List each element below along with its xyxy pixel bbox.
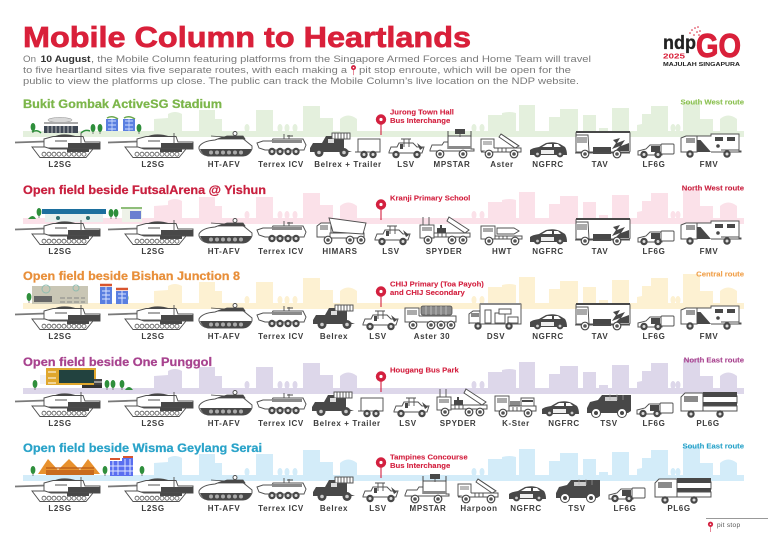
route label: South East route: [682, 442, 745, 450]
vehicle: NGFRC: NGFRC: [532, 247, 564, 256]
route label: Central route: [696, 270, 745, 278]
vehicle: MPSTAR: MPSTAR: [410, 504, 446, 513]
vehicle: HT-AFV: HT-AFV: [208, 247, 240, 256]
vehicle: PL6G: PL6G: [667, 504, 691, 513]
vehicle: Terrex ICV: Terrex ICV: [258, 247, 304, 256]
vehicle: HT-AFV: HT-AFV: [208, 419, 240, 428]
vehicle: HT-AFV: [199, 476, 252, 513]
vehicle: PL6G: [655, 478, 711, 513]
vehicle: Aster 30: [405, 306, 456, 341]
vehicle: L2SG: L2SG: [48, 332, 72, 341]
vehicle: LSV: LSV: [397, 160, 415, 169]
vehicle: LF6G: [609, 488, 645, 513]
pit stop marker: Kranji Primary School: [390, 194, 470, 202]
legend: pit stop: pit stop: [717, 522, 740, 529]
route label: North East route: [684, 356, 745, 364]
vehicle: Aster 30: Aster 30: [414, 332, 450, 341]
vehicle: Belrex: [313, 305, 355, 341]
heading: Open field beside One Punggol: [23, 357, 212, 369]
vehicle: NGFRC: NGFRC: [532, 160, 564, 169]
vehicle: Belrex: [313, 477, 355, 513]
vehicle: LF6G: LF6G: [643, 160, 665, 169]
landmark: One Punggol: [33, 368, 133, 390]
intro paragraph: to five heartland sites via five separate routes, with each making a: [23, 65, 348, 76]
vehicle: TAV: [575, 131, 630, 169]
vehicle: L2SG: L2SG: [141, 419, 165, 428]
vehicle: SPYDER: SPYDER: [440, 419, 476, 428]
vehicle: Terrex ICV: Terrex ICV: [258, 419, 304, 428]
vehicle: LSV: [394, 398, 429, 428]
vehicle: FMV: [681, 306, 741, 341]
vehicle: PL6G: [681, 392, 737, 428]
logo: ndp GO 2025: ndp: [663, 33, 696, 54]
vehicle: Belrex + Trailer: Belrex + Trailer: [314, 160, 382, 169]
vehicle: L2SG: L2SG: [141, 504, 165, 513]
icon: inline pit stop pin: [351, 65, 356, 75]
vehicle: TSV: TSV: [600, 419, 618, 428]
heading: Open field beside FutsalArena @ Yishun: [23, 185, 266, 197]
vehicle: MPSTAR: [405, 474, 449, 513]
vehicle: Terrex ICV: [257, 221, 306, 256]
vehicle: LF6G: LF6G: [643, 247, 665, 256]
logo: ndp GO 2025: MAJULAH SINGAPURA: [663, 62, 740, 68]
vehicle: Terrex ICV: [257, 306, 306, 341]
intro paragraph: , the Mobile Column featuring platforms from the Singapore Armed Forces and Home Team will travel: [91, 54, 591, 65]
vehicle: TSV: TSV: [568, 504, 586, 513]
vehicle: L2SG: [108, 477, 193, 513]
vehicle: LF6G: LF6G: [614, 504, 636, 513]
pit stop marker: Jurong Town Hall: [390, 108, 454, 116]
landmark: Bukit Gombak stadium: [31, 117, 141, 134]
vehicle: LSV: LSV: [399, 419, 417, 428]
intro paragraph: pit stop enroute, which will be open for the: [359, 65, 571, 76]
vehicle: SPYDER: [437, 389, 487, 428]
heading: Bukit Gombak ActiveSG Stadium: [23, 99, 222, 111]
legend: pit stop: [706, 518, 768, 532]
vehicle: FMV: FMV: [700, 160, 718, 169]
vehicle: LF6G: LF6G: [643, 332, 665, 341]
vehicle: Belrex: Belrex: [320, 332, 348, 341]
vehicle: Terrex ICV: [257, 393, 306, 428]
vehicle: NGFRC: [530, 229, 567, 256]
vehicle: Belrex + Trailer: [310, 133, 382, 169]
vehicle: LSV: LSV: [369, 332, 387, 341]
vehicle: L2SG: [15, 477, 100, 513]
vehicle: L2SG: [108, 220, 193, 256]
logo: ndp GO 2025: [663, 26, 741, 68]
pit stop marker: [376, 108, 454, 135]
vehicle: L2SG: L2SG: [48, 247, 72, 256]
vehicle: DSV: DSV: [487, 332, 505, 341]
logo: ndp GO 2025: 2025: [663, 54, 685, 60]
pit stop marker: Bus Interchange: [390, 116, 451, 125]
intro paragraph: 10 August: [40, 54, 91, 65]
pit stop marker: Bus Interchange: [390, 461, 451, 470]
vehicle: HT-AFV: [199, 390, 252, 428]
skyline: purple: [23, 359, 744, 394]
heading: Open field beside Wisma Geylang Serai: [23, 443, 262, 455]
vehicle: TAV: [575, 303, 630, 341]
vehicle: L2SG: [15, 133, 100, 169]
panel: South East route: [15, 442, 745, 513]
vehicle: FMV: [681, 221, 741, 256]
logo: ndp GO 2025: GO: [696, 27, 741, 64]
panel: North West route: [15, 184, 745, 256]
skyline: pink: [23, 189, 744, 224]
vehicle: HT-AFV: [199, 304, 252, 341]
intro paragraph: public to view the platforms up close. The public can track the Mobile Column’s live location on the NDP website.: [23, 76, 579, 87]
vehicle: L2SG: [108, 392, 193, 428]
vehicle: L2SG: L2SG: [48, 504, 72, 513]
vehicle: L2SG: [108, 305, 193, 341]
vehicle: TAV: [575, 218, 630, 256]
vehicle: Terrex ICV: Terrex ICV: [258, 332, 304, 341]
vehicle: L2SG: [15, 220, 100, 256]
vehicle: LSV: LSV: [382, 247, 400, 256]
vehicle: LF6G: [638, 316, 674, 341]
vehicle: L2SG: L2SG: [141, 160, 165, 169]
vehicle: NGFRC: [542, 401, 580, 428]
vehicle: MPSTAR: MPSTAR: [434, 160, 470, 169]
vehicle: FMV: FMV: [700, 247, 718, 256]
panel: South West route: [15, 98, 745, 169]
vehicle: Terrex ICV: Terrex ICV: [258, 504, 304, 513]
skyline: yellow: [23, 274, 744, 309]
vehicle: Belrex + Trailer: Belrex + Trailer: [313, 419, 381, 428]
vehicle: LF6G: LF6G: [643, 419, 665, 428]
panel: Central route: [15, 270, 745, 341]
pit stop marker: [376, 280, 484, 307]
intro paragraph: On: [23, 54, 36, 65]
vehicle: HWT: HWT: [492, 247, 512, 256]
vehicle: NGFRC: [509, 486, 546, 513]
vehicle: SPYDER: SPYDER: [426, 247, 462, 256]
skyline: blue: [23, 446, 744, 481]
heading: Open field beside Bishan Junction 8: [23, 271, 241, 283]
vehicle: FMV: FMV: [700, 332, 718, 341]
vehicle: NGFRC: NGFRC: [532, 332, 564, 341]
vehicle: TAV: TAV: [592, 247, 608, 256]
vehicle: LSV: [375, 226, 410, 256]
vehicle: HT-AFV: HT-AFV: [208, 332, 240, 341]
vehicle: TAV: TAV: [592, 160, 608, 169]
vehicle: HIMARS: HIMARS: [322, 247, 358, 256]
vehicle: Belrex + Trailer: [312, 392, 383, 428]
vehicle: LF6G: [638, 144, 674, 169]
vehicle: LSV: [389, 139, 424, 169]
vehicle: Aster: Aster: [490, 160, 514, 169]
vehicle: FMV: [681, 134, 741, 169]
vehicle: MPSTAR: [430, 129, 474, 169]
vehicle: HWT: [481, 226, 522, 256]
landmark: Bishan Junction 8: [27, 285, 128, 304]
pit stop marker: Tampines Concourse: [390, 452, 468, 462]
vehicle: LSV: [363, 311, 398, 341]
panel: North East route: [15, 356, 745, 428]
vehicle: SPYDER: [420, 217, 470, 256]
vehicle: L2SG: L2SG: [141, 247, 165, 256]
intro paragraph: [23, 54, 591, 87]
pit stop marker: [376, 366, 459, 392]
vehicle: L2SG: [15, 305, 100, 341]
vehicle: Terrex ICV: [257, 478, 306, 513]
route label: South West route: [680, 98, 745, 106]
vehicle: K-Ster: [495, 396, 536, 428]
route label: North West route: [682, 184, 745, 192]
vehicle: TAV: TAV: [592, 332, 608, 341]
vehicle: Aster: [481, 134, 521, 169]
vehicle: HT-AFV: [199, 218, 252, 256]
vehicle: L2SG: L2SG: [141, 332, 165, 341]
vehicle: L2SG: [108, 133, 193, 169]
vehicle: LF6G: [637, 403, 673, 428]
vehicle: Harpoon: Harpoon: [460, 504, 498, 513]
pit stop marker: [376, 194, 470, 220]
vehicle: HT-AFV: [199, 132, 252, 169]
pit stop marker: and CHIJ Secondary: [390, 288, 465, 297]
vehicle: LF6G: [638, 231, 674, 256]
vehicle: LSV: [363, 483, 398, 513]
skyline: green: [23, 102, 744, 137]
title: Mobile Column to Heartlands: [23, 22, 471, 54]
vehicle: NGFRC: NGFRC: [510, 504, 542, 513]
vehicle: Terrex ICV: Terrex ICV: [258, 160, 304, 169]
pit stop marker: CHIJ Primary (Toa Payoh): [390, 280, 484, 288]
vehicle: Terrex ICV: [257, 134, 306, 169]
landmark: FutsalArena Yishun: [28, 208, 142, 222]
vehicle: L2SG: L2SG: [48, 419, 72, 428]
vehicle: TSV: [587, 394, 631, 428]
vehicle: LSV: LSV: [369, 504, 387, 513]
vehicle: HT-AFV: HT-AFV: [208, 504, 240, 513]
vehicle: L2SG: L2SG: [48, 160, 72, 169]
vehicle: NGFRC: NGFRC: [548, 419, 580, 428]
pit stop marker: Hougang Bus Park: [390, 366, 459, 374]
vehicle: NGFRC: [530, 142, 567, 169]
vehicle: Belrex: Belrex: [320, 504, 348, 513]
pit stop marker: [376, 452, 468, 478]
vehicle: PL6G: PL6G: [696, 419, 720, 428]
vehicle: L2SG: [15, 392, 100, 428]
landmark: Wisma Geylang Serai: [31, 457, 144, 476]
vehicle: TSV: [556, 479, 600, 513]
vehicle: NGFRC: [530, 314, 567, 341]
vehicle: HT-AFV: HT-AFV: [208, 160, 240, 169]
vehicle: DSV: [469, 303, 521, 341]
vehicle: Harpoon: [458, 479, 498, 513]
vehicle: HIMARS: [317, 218, 366, 256]
vehicle: K-Ster: K-Ster: [502, 419, 530, 428]
